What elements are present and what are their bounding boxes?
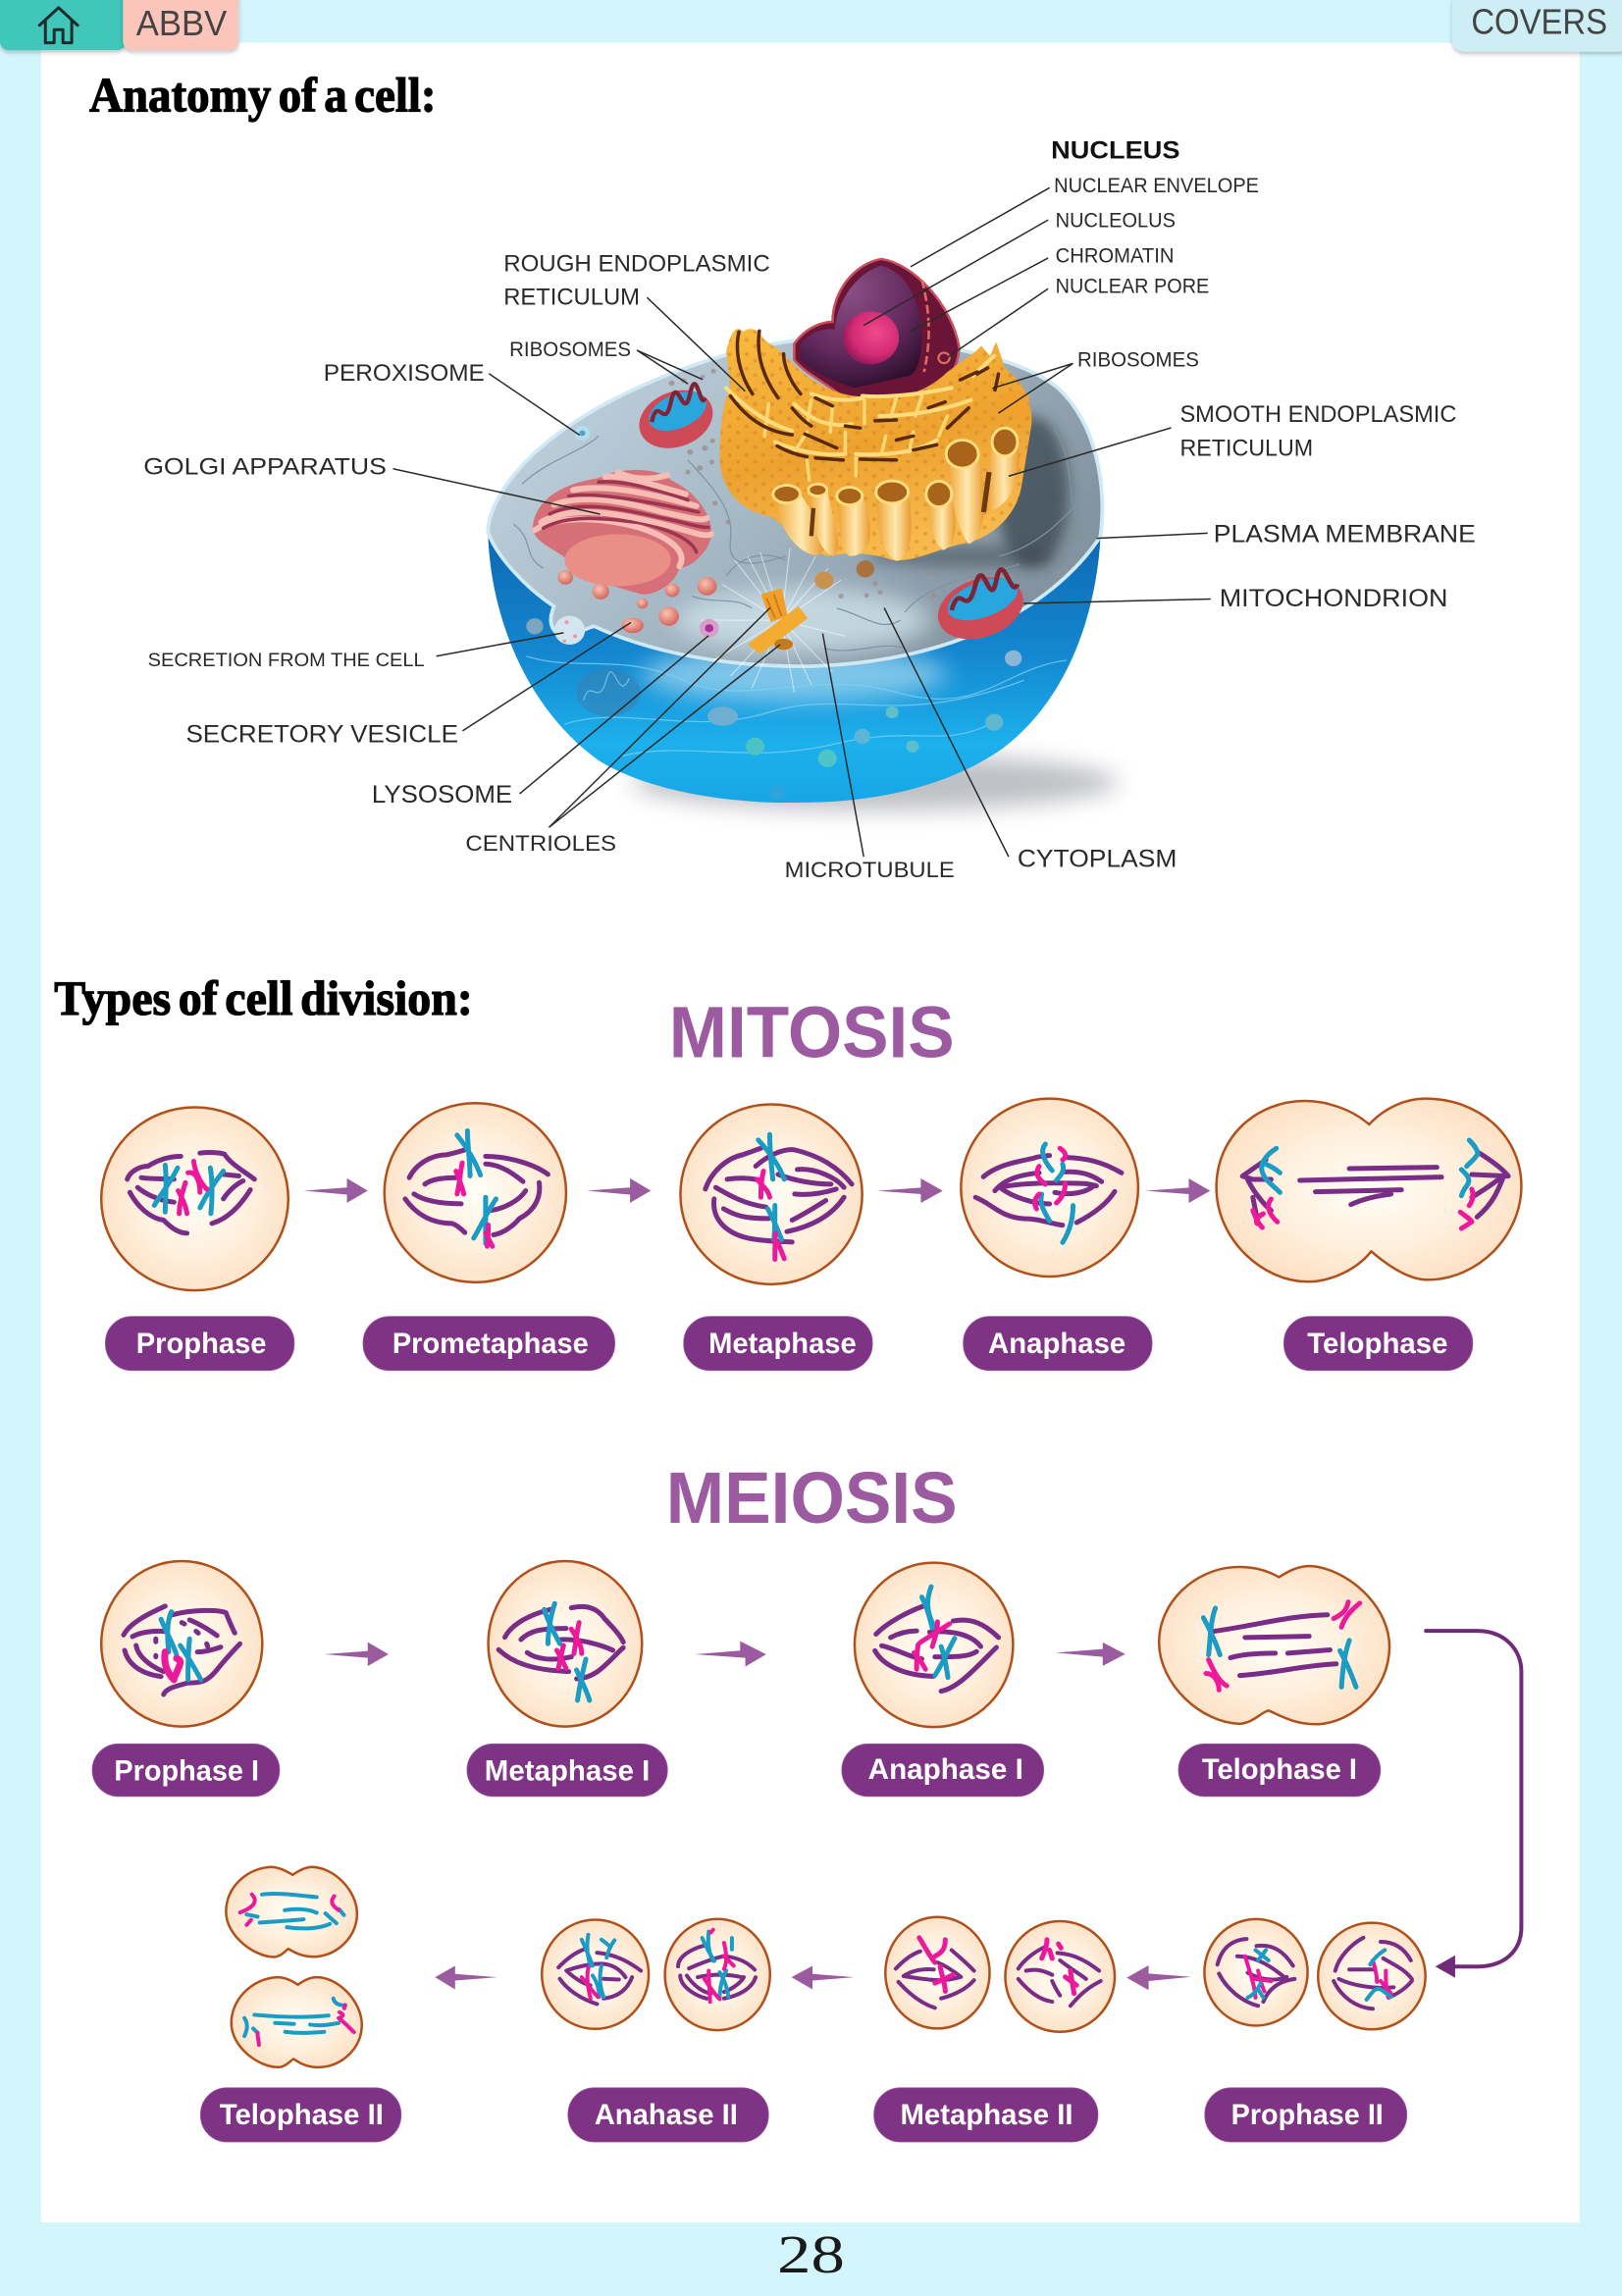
- meiosis cell: anaphase I: [855, 1563, 1013, 1727]
- label: prometaphase: [363, 1317, 615, 1371]
- small organelles: [554, 369, 936, 645]
- organelle: rough endoplasmic reticulum: [720, 329, 1031, 560]
- arrow: [587, 1178, 651, 1203]
- arrow: [1126, 1965, 1191, 1990]
- cell labels: RIBOSOMES: [1077, 348, 1199, 371]
- icon: home: [39, 8, 78, 43]
- meiosis cells: telophase II: [226, 1867, 362, 2067]
- arrow: [1145, 1178, 1210, 1203]
- label: prophase: Prophase: [136, 1328, 267, 1360]
- meiosis cells: anaphase II: [542, 1919, 770, 2030]
- cell labels: NUCLEUS: [1051, 136, 1179, 164]
- mitosis cell: anaphase: [961, 1099, 1138, 1277]
- heading: mitosis: MITOSIS: [669, 991, 955, 1073]
- cell labels: SMOOTH ENDOPLASMIC: [1179, 401, 1456, 428]
- label: anahase II: Anahase II: [595, 2099, 738, 2131]
- cell illustration: [488, 259, 1118, 810]
- label: telophase II: Telophase II: [220, 2099, 384, 2131]
- mitosis cell: prophase: [101, 1108, 288, 1290]
- arrow: [877, 1178, 943, 1203]
- label: anaphase I: Anaphase I: [868, 1753, 1023, 1786]
- cell bowl: [488, 532, 1101, 803]
- cell labels: [143, 136, 1476, 882]
- arrow: [304, 1178, 368, 1203]
- tab: ABBV: ABBV: [136, 4, 227, 43]
- cytoplasm surface: [488, 339, 1102, 666]
- label: telophase I: Telophase I: [1202, 1753, 1357, 1786]
- arrow: [325, 1643, 389, 1666]
- tab: COVERS: COVERS: [1471, 3, 1607, 42]
- label: telophase: Telophase: [1307, 1328, 1447, 1360]
- organelle: smooth endoplasmic reticulum tubes: [773, 391, 1029, 561]
- label: metaphase I: Metaphase I: [485, 1754, 650, 1787]
- meiosis cells: metaphase II: [885, 1917, 1115, 2032]
- mitosis cell: prometaphase: [385, 1103, 566, 1282]
- cell labels: RETICULUM: [503, 285, 640, 311]
- label: metaphase II: Metaphase II: [901, 2099, 1073, 2131]
- mitosis cell: metaphase: [680, 1105, 863, 1284]
- organelle: mitochondrion upper: [629, 380, 723, 459]
- label: prophase II: [1205, 2088, 1407, 2142]
- label: telophase: [1283, 1317, 1473, 1371]
- cell labels: PEROXISOME: [324, 360, 485, 387]
- cell labels: NUCLEAR PORE: [1056, 276, 1209, 298]
- cell labels: CHROMATIN: [1056, 244, 1174, 267]
- label: metaphase: [684, 1317, 872, 1371]
- arrow: [695, 1642, 766, 1667]
- label: prophase: [105, 1317, 294, 1371]
- arrow: [1056, 1643, 1125, 1666]
- label: prophase II: Prophase II: [1231, 2099, 1384, 2131]
- cell labels: ROUGH ENDOPLASMIC: [503, 250, 770, 277]
- organelle: nucleus: [794, 259, 960, 404]
- pointer lines: [393, 187, 1211, 857]
- cell labels: CYTOPLASM: [1018, 846, 1177, 873]
- arrow: [435, 1965, 497, 1989]
- heading: meiosis: MEIOSIS: [666, 1456, 958, 1539]
- organelle: centrioles: [748, 588, 808, 654]
- mitosis cell: telophase: [1217, 1099, 1521, 1281]
- label: telophase II: [200, 2088, 401, 2142]
- meiosis cell: telophase I: [1159, 1566, 1389, 1724]
- cell labels: SECRETORY VESICLE: [185, 721, 458, 749]
- label: anaphase I: [842, 1744, 1044, 1797]
- label: anaphase: Anaphase: [988, 1328, 1125, 1360]
- cell labels: LYSOSOME: [372, 781, 512, 809]
- label: anahase II: [568, 2088, 768, 2142]
- meiosis cells: prophase II: [1204, 1919, 1426, 2029]
- cell labels: NUCLEAR ENVELOPE: [1054, 175, 1259, 197]
- cell labels: SECRETION FROM THE CELL: [148, 650, 425, 671]
- meiosis cell: metaphase I: [489, 1561, 642, 1727]
- cell labels: MITOCHONDRION: [1220, 585, 1447, 612]
- cell labels: PLASMA MEMBRANE: [1214, 520, 1476, 548]
- heading: anatomy of a cell: Anatomy of a cell:: [89, 69, 437, 123]
- meiosis cell: prophase I: [101, 1561, 262, 1727]
- label: prophase I: Prophase I: [114, 1754, 259, 1787]
- bowl shadow: [633, 755, 1118, 810]
- cell labels: GOLGI APPARATUS: [143, 454, 387, 481]
- label: prophase I: [92, 1744, 280, 1797]
- label: anaphase: [964, 1317, 1152, 1371]
- label: metaphase: Metaphase: [708, 1328, 857, 1360]
- tab: home: [0, 0, 126, 50]
- organelle: golgi apparatus: [533, 470, 717, 633]
- label: telophase I: [1178, 1744, 1381, 1797]
- cell labels: RIBOSOMES: [509, 339, 631, 361]
- organelle: mitochondrion lower: [928, 566, 1033, 651]
- arrow: connector to second row: [1426, 1631, 1521, 1978]
- heading: types of cell division: Types of cell division:: [54, 971, 473, 1025]
- microtubule rays: [701, 548, 845, 693]
- label: prometaphase: Prometaphase: [392, 1328, 589, 1360]
- cell labels: CENTRIOLES: [465, 831, 616, 856]
- cell labels: RETICULUM: [1179, 435, 1313, 461]
- arrow: [792, 1965, 854, 1989]
- cell labels: MICROTUBULE: [785, 858, 955, 882]
- tab: ABBV: [123, 0, 238, 50]
- cell labels: NUCLEOLUS: [1056, 210, 1176, 233]
- page number: 28: [777, 2224, 845, 2284]
- label: metaphase I: [467, 1744, 667, 1797]
- label: metaphase II: [874, 2088, 1098, 2142]
- tab: COVERS: [1452, 0, 1622, 52]
